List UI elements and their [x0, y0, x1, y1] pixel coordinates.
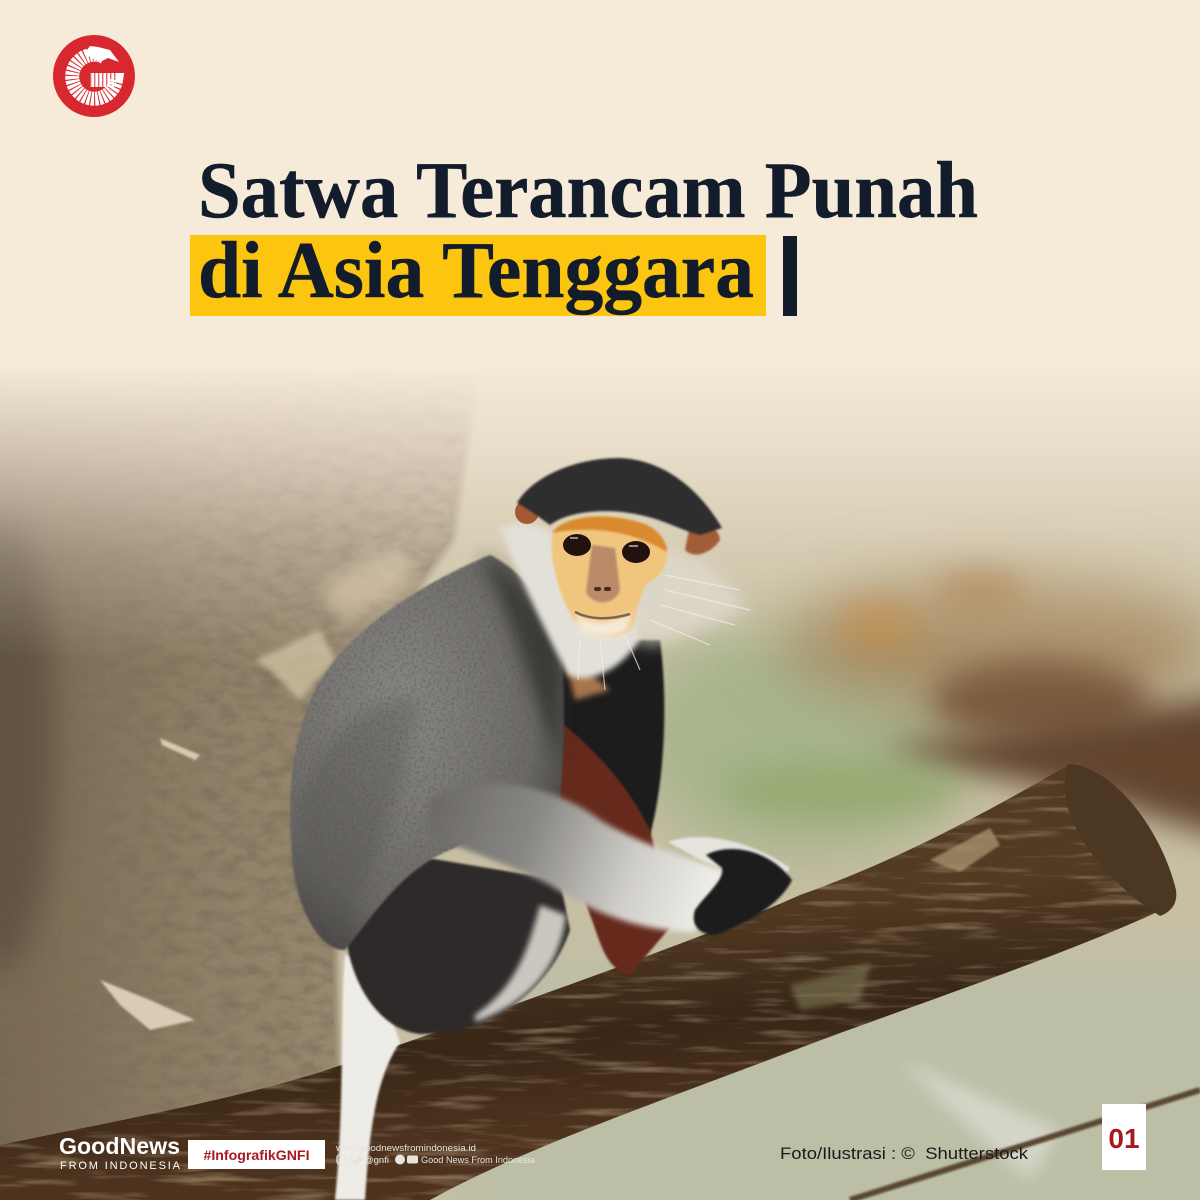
social links: Good News From Indonesia: [421, 1155, 536, 1166]
title: [190, 147, 978, 316]
logo eagle head: [84, 46, 119, 62]
nose ridge: [586, 545, 620, 602]
red leg: [548, 715, 672, 975]
ear right: [685, 523, 720, 555]
orange brow: [552, 517, 667, 552]
logo badge: [53, 35, 135, 117]
social links: [335, 1143, 536, 1166]
tail: [335, 955, 400, 1200]
grey torso: [290, 555, 564, 950]
chest: [560, 640, 664, 835]
social links: @gnfi: [364, 1155, 389, 1166]
footer brand: [59, 1133, 181, 1172]
branch: [0, 764, 1176, 1200]
photo background fading into cream: [0, 360, 1200, 1200]
near arm: [430, 784, 726, 932]
page number box: 01: [1108, 1123, 1140, 1154]
hand: [694, 849, 792, 935]
logo G mark: [72, 55, 116, 99]
head: [515, 458, 722, 637]
ear left: [515, 500, 539, 524]
tree trunk: [0, 370, 480, 1155]
highlight bar: [190, 235, 766, 316]
blurred forest backdrop: [334, 405, 1200, 1200]
social icons: [337, 1154, 418, 1164]
hashtag box: [188, 1140, 325, 1169]
eyes: [563, 534, 591, 556]
pale chin: [575, 612, 632, 637]
GoodNews wordmark: GoodNews: [59, 1133, 180, 1159]
lower body: [345, 850, 570, 1034]
far arm: [668, 837, 790, 890]
eye highlights: [570, 538, 638, 546]
face mask: [552, 516, 667, 637]
title line 1: Satwa Terancam Punah: [198, 147, 978, 235]
neck tint: [562, 650, 610, 700]
black cap: [517, 458, 722, 535]
monkey: [290, 458, 792, 1200]
mouth: [575, 612, 630, 618]
nostrils: [596, 587, 609, 591]
hashtag box: #InfografikGNFI: [204, 1148, 310, 1163]
social links: www.goodnewsfromindonesia.id: [335, 1143, 476, 1154]
from indonesia: FROM INDONESIA: [60, 1160, 181, 1172]
branch cut end: [1065, 764, 1176, 916]
white neck ruff: [500, 524, 750, 690]
white thigh: [475, 905, 566, 1022]
page number box: [1102, 1104, 1146, 1170]
photo credit: Foto/Ilustrasi : © Shutterstock: [780, 1144, 1029, 1163]
cursor bar: [783, 236, 797, 316]
title line 2: di Asia Tenggara: [198, 227, 754, 315]
